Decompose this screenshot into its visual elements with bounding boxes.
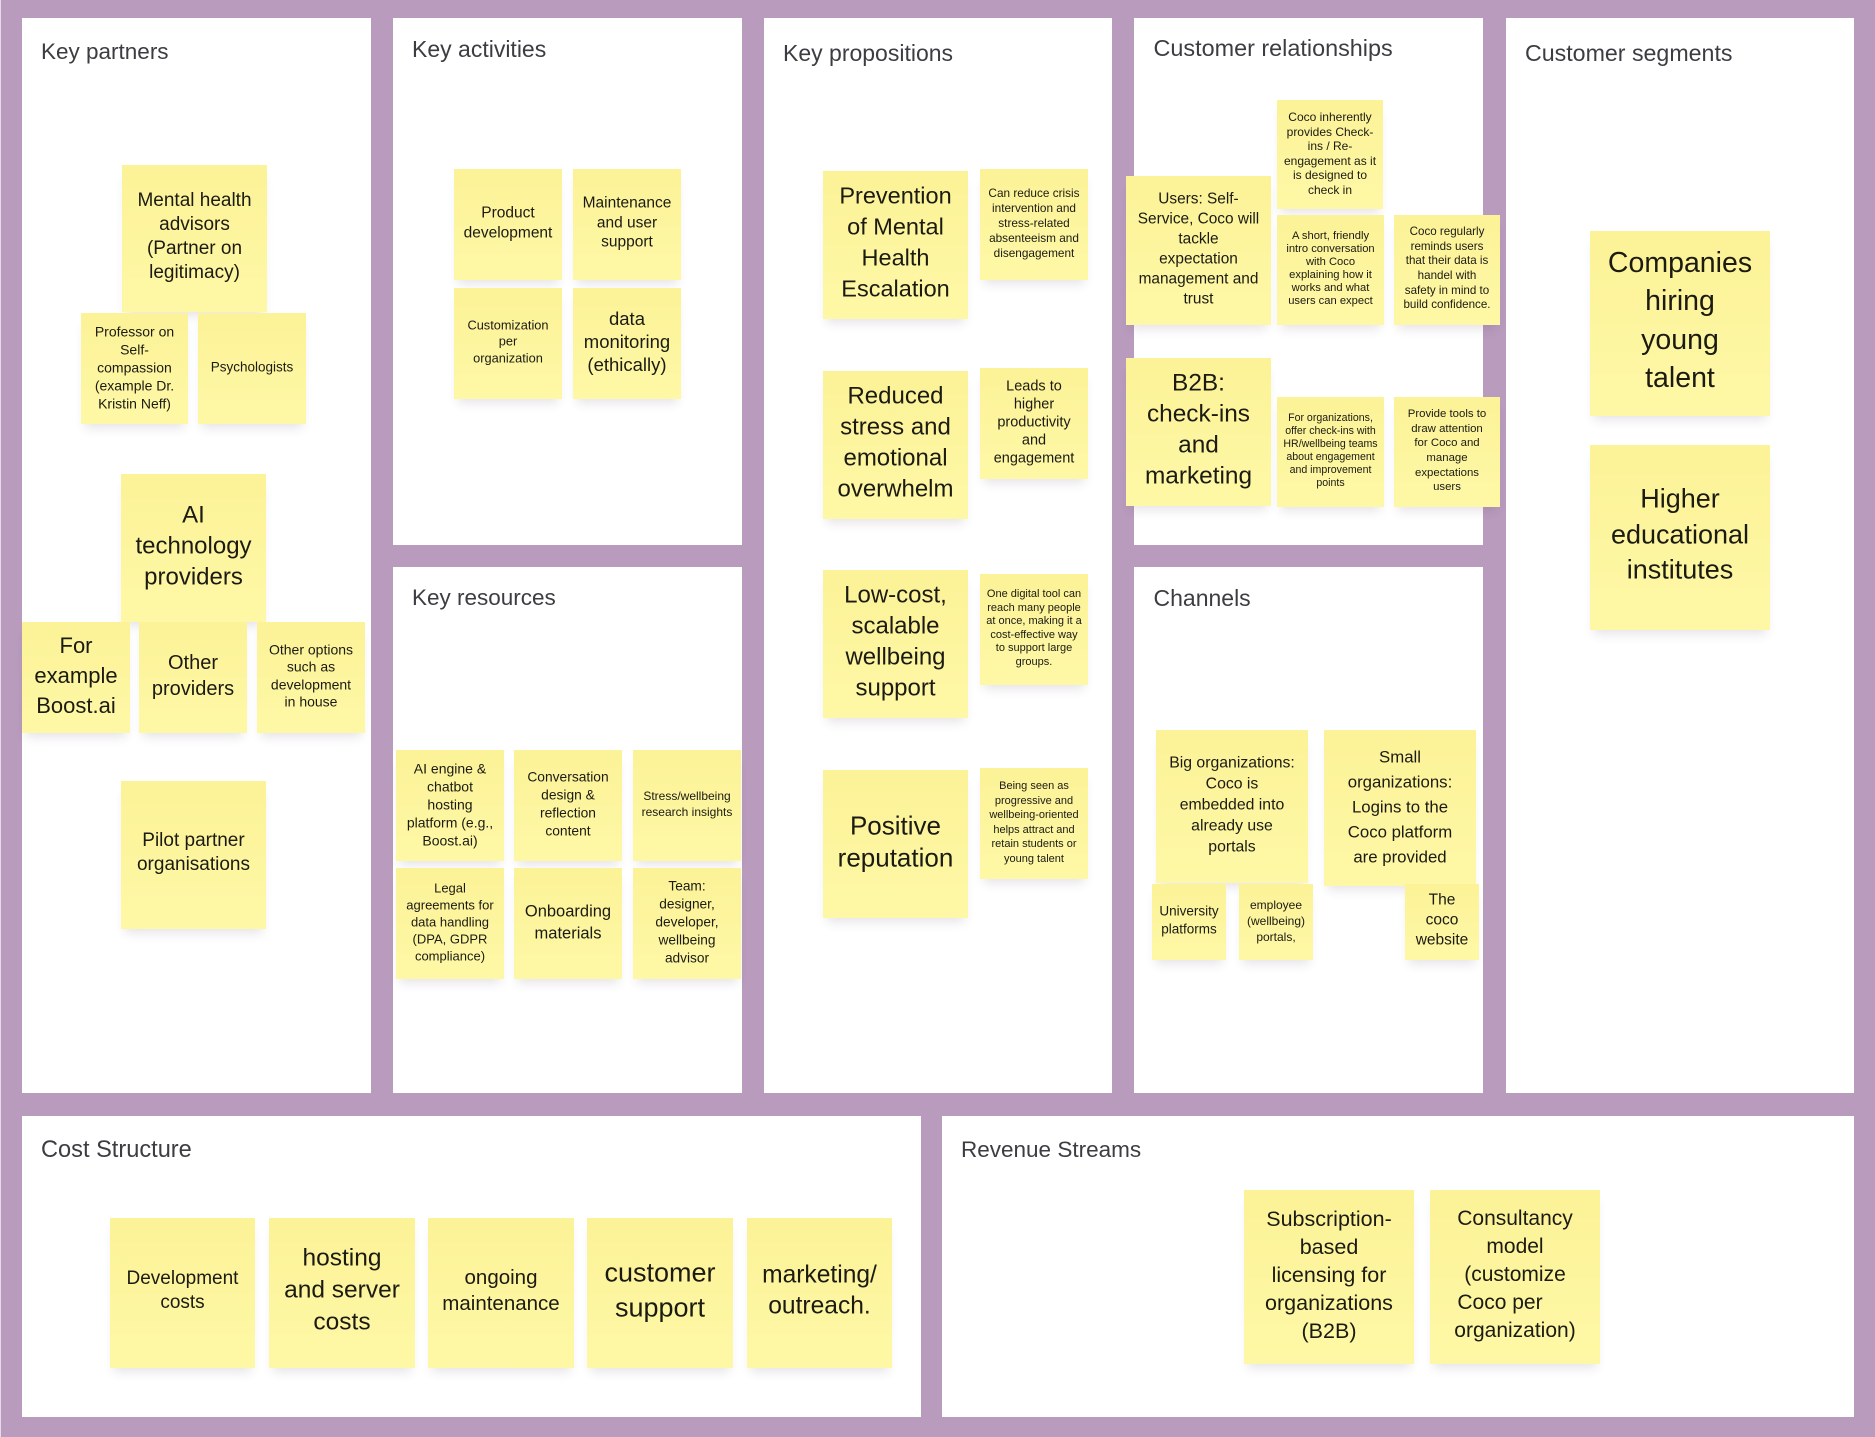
sticky: development costs <box>110 1218 255 1368</box>
sticky: low-cost scalable wellbeing: scalable <box>851 613 940 640</box>
sticky: positive reputation: reputation <box>838 842 953 872</box>
sticky: other providers: Other <box>168 652 218 674</box>
sticky: hosting and server costs: and server <box>284 1277 400 1304</box>
sticky: other options <box>257 622 365 733</box>
sticky: AI engine and chatbot platform <box>396 750 504 861</box>
sticky: B2B check-ins and marketing: marketing <box>1145 463 1252 490</box>
sticky: the coco website <box>1405 884 1479 960</box>
sticky: for example Boost.ai <box>22 622 130 733</box>
sticky: low-cost scalable wellbeing: wellbeing <box>845 644 946 671</box>
sticky: other options: in house <box>285 694 337 710</box>
sticky: onboarding materials: materials <box>535 924 601 942</box>
heading: revenue streams: Revenue Streams <box>961 1137 1141 1162</box>
sticky: professor on self-compassion <box>81 313 188 424</box>
sticky: companies hiring young talent: Companies <box>1608 247 1752 279</box>
sticky: coco inherently provides check-ins: Coco inherently <box>1288 110 1372 124</box>
sticky: companies hiring young talent: young <box>1641 324 1719 356</box>
heading: key partners: Key partners <box>41 39 169 64</box>
sticky: one digital tool <box>980 574 1088 685</box>
sticky: short friendly intro: users can expect <box>1288 295 1373 307</box>
sticky: being seen as progressive: progressive and <box>995 794 1073 806</box>
sticky: leads to higher productivity: Leads to <box>1006 378 1062 394</box>
sticky: big organizations: portals <box>1208 838 1256 855</box>
sticky: coco regularly reminds: safety in mind to <box>1405 283 1489 296</box>
sticky: prevention of mental health escalation: Escalation <box>841 276 950 302</box>
sticky: big organizations: already use <box>1191 817 1273 834</box>
sticky: leads to higher productivity: higher <box>1014 396 1054 412</box>
sticky: users self-service: Service, Coco will <box>1138 210 1259 227</box>
sticky: being seen as progressive: wellbeing-oriented <box>989 809 1079 821</box>
panel: customer segments <box>1506 18 1854 1093</box>
sticky: for organizations: points <box>1316 477 1345 489</box>
heading: key propositions: Key propositions <box>783 40 953 66</box>
sticky: other providers <box>139 622 247 733</box>
panel: revenue streams <box>942 1116 1854 1417</box>
sticky: can reduce crisis intervention <box>980 169 1088 280</box>
sticky: onboarding materials <box>514 868 622 979</box>
sticky: can reduce crisis intervention: absenteeism and <box>989 231 1079 245</box>
sticky: customization per organization: organization <box>473 350 543 365</box>
sticky: leads to higher productivity: and <box>1022 432 1046 448</box>
sticky: coco inherently provides check-ins: is designed to <box>1293 168 1367 182</box>
sticky: reduced stress: Reduced <box>847 383 944 410</box>
sticky: coco regularly reminds: build confidence. <box>1403 298 1490 311</box>
sticky: provide tools: manage <box>1426 452 1468 464</box>
sticky: development costs: Development <box>127 1268 238 1289</box>
sticky: customization per organization: per <box>499 334 517 349</box>
sticky: pilot partner organisations: Pilot partner <box>142 830 245 851</box>
panel: key resources <box>393 567 742 1093</box>
sticky: B2B check-ins and marketing <box>1126 358 1271 506</box>
sticky: provide tools: for Coco and <box>1414 437 1480 449</box>
sticky: can reduce crisis intervention: stress-related <box>998 216 1070 230</box>
sticky: data monitoring: data <box>609 308 645 329</box>
panel: key partners <box>22 18 371 1093</box>
sticky: users self-service <box>1126 176 1271 325</box>
sticky: one digital tool: reach many people <box>987 601 1081 613</box>
sticky: being seen as progressive <box>980 768 1088 879</box>
sticky: prevention of mental health escalation: Health <box>862 245 929 271</box>
sticky: conversation design <box>514 750 622 861</box>
sticky: team <box>633 868 741 979</box>
sticky: coco inherently provides check-ins: provides Check- <box>1287 124 1373 138</box>
sticky: subscription-based licensing: organizations <box>1265 1291 1393 1315</box>
sticky: coco regularly reminds: Coco regularly <box>1410 225 1484 238</box>
sticky: AI engine and chatbot platform: hosting <box>427 796 473 812</box>
sticky: prevention of mental health escalation: of Mental <box>847 214 944 240</box>
panel: cost structure <box>22 1116 921 1417</box>
sticky: consultancy model: (customize <box>1464 1263 1566 1286</box>
sticky: big organizations: embedded into <box>1180 796 1284 813</box>
sticky: hosting and server costs: hosting <box>302 1245 382 1272</box>
sticky: positive reputation: Positive <box>850 810 941 840</box>
sticky: hosting and server costs <box>269 1218 415 1368</box>
sticky: AI technology providers: AI <box>182 501 205 528</box>
sticky: companies hiring young talent <box>1590 231 1770 416</box>
heading: customer relationships: Customer relationships <box>1154 35 1393 61</box>
sticky: big organizations: Big organizations: <box>1169 754 1295 771</box>
sticky: subscription-based licensing: (B2B) <box>1302 1319 1356 1343</box>
sticky: product development: development <box>464 224 552 241</box>
sticky: users self-service: Users: Self- <box>1158 190 1239 207</box>
sticky: companies hiring young talent: hiring <box>1645 285 1715 317</box>
sticky: reduced stress <box>823 371 968 519</box>
sticky: provide tools: expectations <box>1415 466 1479 478</box>
sticky: data monitoring: monitoring <box>584 331 670 352</box>
sticky: for organizations: offer check-ins with <box>1285 425 1376 437</box>
sticky: reduced stress: overwhelm <box>837 476 954 503</box>
sticky: leads to higher productivity: productivity <box>997 414 1071 430</box>
panel: channels <box>1134 567 1483 1093</box>
sticky: for organizations: For organizations, <box>1288 412 1373 424</box>
sticky: conversation design: reflection <box>540 805 596 820</box>
sticky: positive reputation <box>823 770 968 918</box>
sticky: stress and wellbeing research <box>633 750 741 861</box>
sticky: maintenance and user support: and user <box>597 214 657 231</box>
sticky: for organizations: about engagement <box>1286 451 1375 463</box>
sticky: university platforms <box>1152 884 1226 960</box>
sticky: higher educational institutes: Higher <box>1640 484 1720 514</box>
sticky: consultancy model: Consultancy <box>1457 1207 1573 1230</box>
sticky: provide tools: draw attention <box>1411 423 1483 435</box>
sticky: one digital tool: at once, making it a <box>986 615 1082 627</box>
sticky: employee wellbeing portals: portals, <box>1256 930 1296 944</box>
sticky: B2B check-ins and marketing: and <box>1178 432 1219 459</box>
sticky: ongoing maintenance <box>428 1218 574 1368</box>
sticky: small organizations: are provided <box>1353 847 1447 866</box>
sticky: customization per organization <box>454 288 562 399</box>
sticky: legal agreements: (DPA, GDPR <box>413 932 487 947</box>
sticky: marketing and outreach: outreach. <box>768 1293 871 1320</box>
sticky: other options: development <box>271 676 351 692</box>
heading: channels: Channels <box>1154 585 1251 611</box>
sticky: one digital tool: groups. <box>1016 655 1052 667</box>
sticky: subscription-based licensing: licensing for <box>1272 1263 1386 1287</box>
sticky: onboarding materials: Onboarding <box>525 902 611 920</box>
sticky: short friendly intro: works and what <box>1292 282 1369 294</box>
sticky: maintenance and user support: support <box>601 234 653 251</box>
heading: customer segments: Customer segments <box>1525 40 1732 66</box>
heading: key resources: Key resources <box>412 585 556 610</box>
sticky: coco regularly reminds: reminds users <box>1411 240 1483 253</box>
sticky: legal agreements: agreements for <box>406 898 494 913</box>
sticky: for example Boost.ai: For <box>60 632 92 657</box>
sticky: for example Boost.ai: example <box>34 662 118 687</box>
sticky: customer support: support <box>615 1292 705 1322</box>
sticky: users self-service: tackle <box>1178 230 1219 247</box>
sticky: team: Team: <box>668 878 706 893</box>
sticky: professor on self-compassion: Kristin Neff) <box>98 395 171 411</box>
sticky: low-cost scalable wellbeing: support <box>855 675 936 702</box>
sticky: other options: Other options <box>269 641 353 657</box>
sticky: for example Boost.ai: Boost.ai <box>36 692 116 717</box>
sticky: can reduce crisis intervention: Can reduce crisis <box>988 186 1080 200</box>
sticky: for organizations: HR/wellbeing teams <box>1283 438 1378 450</box>
sticky: ongoing maintenance: maintenance <box>442 1292 560 1315</box>
sticky: coco inherently provides check-ins: check in <box>1308 182 1352 196</box>
sticky: can reduce crisis intervention: disengagement <box>994 246 1074 260</box>
sticky: coco regularly reminds: handel with <box>1418 269 1476 282</box>
sticky: professor on self-compassion: compassion <box>97 359 172 375</box>
sticky: marketing and outreach <box>747 1218 892 1368</box>
sticky: marketing and outreach: marketing/ <box>762 1262 877 1289</box>
sticky: AI technology providers <box>121 474 266 622</box>
sticky: being seen as progressive: retain students or <box>992 838 1076 850</box>
sticky: legal agreements: data handling <box>411 915 489 930</box>
sticky: reduced stress: stress and <box>840 414 951 441</box>
sticky: the coco website: coco <box>1426 911 1458 928</box>
sticky: users self-service: management and <box>1139 270 1258 287</box>
sticky: coco regularly reminds: that their data is <box>1406 254 1488 267</box>
sticky: B2B check-ins and marketing: check-ins <box>1147 401 1250 428</box>
heading: cost structure: Cost Structure <box>41 1137 192 1163</box>
panel: customer relationships <box>1134 18 1483 545</box>
sticky: coco regularly reminds <box>1394 215 1500 325</box>
sticky: employee wellbeing portals <box>1239 884 1313 960</box>
sticky: mental health advisors: legitimacy) <box>149 262 240 283</box>
sticky: small organizations: organizations: <box>1348 772 1452 791</box>
sticky: low-cost scalable wellbeing <box>823 570 968 718</box>
sticky: small organizations: Small <box>1379 747 1421 766</box>
sticky: short friendly intro: explaining how it <box>1289 269 1372 281</box>
sticky: provide tools: Provide tools to <box>1408 408 1486 420</box>
sticky: coco inherently provides check-ins: engagement as it <box>1284 153 1376 167</box>
sticky: pilot partner organisations: organisations <box>137 854 250 875</box>
sticky: higher educational institutes <box>1590 445 1770 630</box>
sticky: customer support <box>587 1218 733 1368</box>
panel: key activities <box>393 18 742 545</box>
sticky: employee wellbeing portals: employee <box>1250 898 1302 912</box>
sticky: coco inherently provides check-ins <box>1277 100 1383 209</box>
sticky: team: developer, <box>655 914 719 929</box>
sticky: mental health advisors: advisors <box>159 214 230 235</box>
sticky: being seen as progressive: helps attract and <box>993 823 1075 835</box>
sticky: professor on self-compassion: Professor on <box>95 323 174 339</box>
sticky: B2B check-ins and marketing: B2B: <box>1172 370 1225 397</box>
sticky: consultancy model: model <box>1486 1235 1544 1258</box>
sticky: the coco website: The <box>1429 891 1455 908</box>
sticky: mental health advisors: (Partner on <box>147 238 242 259</box>
sticky: team: designer, <box>659 896 715 911</box>
sticky: big organizations: Coco is <box>1206 775 1258 792</box>
sticky: higher educational institutes: educational <box>1611 519 1749 549</box>
sticky: hosting and server costs: costs <box>313 1309 371 1336</box>
sticky: legal agreements: Legal <box>434 881 466 896</box>
sticky: users self-service: trust <box>1184 290 1213 307</box>
sticky: legal agreements: compliance) <box>415 949 485 964</box>
sticky: product development <box>454 169 562 280</box>
sticky: subscription-based licensing: based <box>1300 1235 1358 1259</box>
sticky: low-cost scalable wellbeing: Low-cost, <box>844 582 947 609</box>
sticky: stress and wellbeing research: research insights <box>642 804 732 818</box>
sticky: development costs: costs <box>160 1292 205 1313</box>
sticky: small organizations: Coco platform <box>1348 822 1452 841</box>
sticky: conversation design: content <box>545 823 591 838</box>
sticky: customer support: customer <box>604 1257 716 1287</box>
sticky: consultancy model: Coco per <box>1457 1291 1543 1314</box>
sticky: psychologists <box>198 313 306 424</box>
sticky: psychologists: Psychologists <box>211 359 293 374</box>
sticky: for organizations: and improvement <box>1290 464 1371 476</box>
sticky: subscription-based licensing <box>1244 1190 1414 1364</box>
sticky: leads to higher productivity: engagement <box>994 450 1074 466</box>
sticky: can reduce crisis intervention: intervention and <box>992 201 1076 215</box>
sticky: the coco website: website <box>1416 931 1468 948</box>
sticky: AI engine and chatbot platform: platform (e.g., <box>407 814 493 830</box>
sticky: subscription-based licensing: Subscription- <box>1266 1207 1392 1231</box>
sticky: professor on self-compassion: Self- <box>120 341 149 357</box>
sticky: maintenance and user support: Maintenance <box>583 195 671 212</box>
sticky: one digital tool: cost-effective way <box>990 628 1078 640</box>
sticky: pilot partner organisations <box>121 781 266 929</box>
sticky: product development: Product <box>481 204 535 221</box>
heading: key activities: Key activities <box>412 36 546 62</box>
sticky: provide tools <box>1394 397 1500 507</box>
sticky: mental health advisors: Mental health <box>137 190 252 211</box>
sticky: mental health advisors <box>122 165 267 312</box>
sticky: university platforms: platforms <box>1161 922 1217 937</box>
sticky: consultancy model <box>1430 1190 1600 1364</box>
sticky: data monitoring: (ethically) <box>587 354 667 375</box>
sticky: team: wellbeing <box>658 932 716 947</box>
sticky: leads to higher productivity <box>980 368 1088 479</box>
sticky: provide tools: users <box>1433 481 1461 493</box>
sticky: prevention of mental health escalation: Prevention <box>839 183 952 209</box>
sticky: higher educational institutes: institutes <box>1627 555 1733 585</box>
sticky: other options: such as <box>287 659 335 675</box>
sticky: being seen as progressive: young talent <box>1004 852 1064 864</box>
sticky: small organizations <box>1324 730 1476 886</box>
sticky: AI engine and chatbot platform: chatbot <box>427 778 473 794</box>
sticky: prevention of mental health escalation <box>823 171 968 319</box>
sticky: short friendly intro: with Coco <box>1306 256 1355 268</box>
sticky: customization per organization: Customization <box>467 317 549 332</box>
sticky: being seen as progressive: Being seen as <box>999 780 1069 792</box>
sticky: data monitoring <box>573 288 681 399</box>
sticky: team: advisor <box>665 950 709 965</box>
sticky: AI engine and chatbot platform: Boost.ai) <box>422 832 478 848</box>
sticky: ongoing maintenance: ongoing <box>465 1266 537 1289</box>
sticky: employee wellbeing portals: (wellbeing) <box>1247 914 1305 928</box>
panel: key propositions <box>764 18 1112 1093</box>
sticky: coco inherently provides check-ins: ins / Re- <box>1308 139 1352 153</box>
sticky: university platforms: University <box>1159 904 1219 919</box>
sticky: short friendly intro: intro conversation <box>1286 243 1375 255</box>
sticky: AI technology providers: providers <box>144 563 243 590</box>
sticky: conversation design: design & <box>541 787 595 802</box>
sticky: conversation design: Conversation <box>527 769 609 784</box>
sticky: reduced stress: emotional <box>843 445 948 472</box>
sticky: one digital tool: to support large <box>996 642 1072 654</box>
sticky: short friendly intro: A short, friendly <box>1292 230 1369 242</box>
sticky: AI technology providers: technology <box>135 532 252 559</box>
sticky: companies hiring young talent: talent <box>1645 362 1715 394</box>
sticky: legal agreements <box>396 868 504 979</box>
sticky: one digital tool: One digital tool can <box>987 588 1081 600</box>
sticky: other providers: providers <box>152 678 234 700</box>
sticky: consultancy model: organization) <box>1454 1319 1576 1342</box>
sticky: AI engine and chatbot platform: AI engine & <box>414 760 486 776</box>
sticky: stress and wellbeing research: Stress/wellbeing <box>643 789 731 803</box>
sticky: for organizations <box>1277 397 1384 507</box>
sticky: small organizations: Logins to the <box>1352 797 1448 816</box>
sticky: big organizations <box>1156 730 1308 883</box>
sticky: users self-service: expectation <box>1159 250 1238 267</box>
sticky: professor on self-compassion: (example Dr. <box>95 377 174 393</box>
sticky: short friendly intro <box>1277 215 1384 325</box>
sticky: maintenance and user support <box>573 169 681 280</box>
